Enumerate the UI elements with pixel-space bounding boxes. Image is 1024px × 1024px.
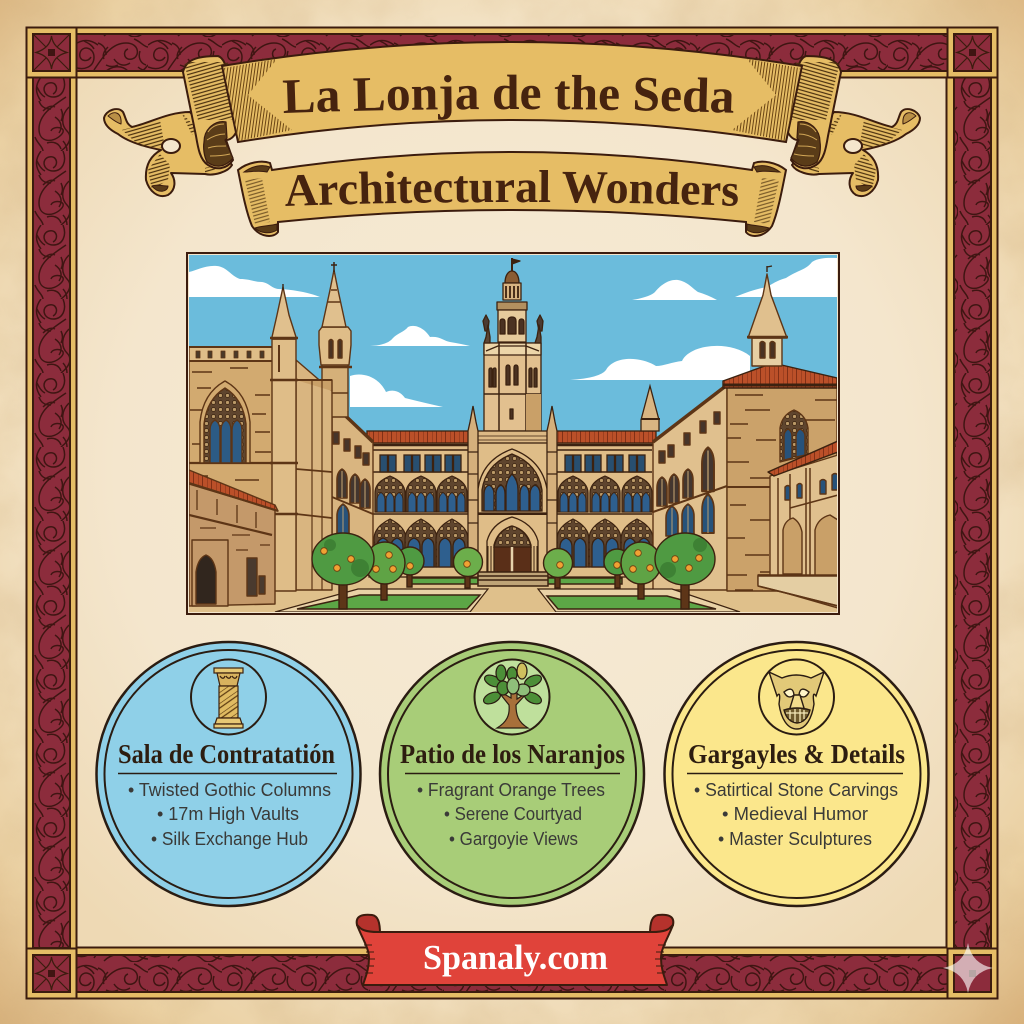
border: right band — [954, 76, 991, 948]
watermark sparkle — [943, 943, 993, 993]
sky — [189, 255, 837, 437]
left wing — [189, 262, 373, 606]
footer ribbon — [357, 915, 673, 985]
bullet list: • Gargoyie Views — [449, 829, 578, 849]
big left block — [189, 362, 272, 503]
ribbon tail and fold: left — [104, 56, 238, 196]
border: bottom band — [76, 955, 948, 992]
central tower — [483, 258, 543, 431]
main door — [487, 517, 538, 572]
clouds — [189, 258, 837, 407]
subtitle text: Architectural Wonders — [285, 170, 738, 206]
big right block — [727, 386, 837, 591]
ribbon tail and fold: right — [786, 56, 920, 196]
low left building — [189, 484, 275, 606]
heading: Sala de Contratatión — [118, 739, 335, 769]
bullet list — [128, 780, 331, 849]
orange trees — [312, 533, 715, 609]
large gothic window — [200, 381, 250, 463]
border: top band — [76, 34, 948, 71]
bullet list — [694, 780, 898, 849]
second block — [296, 360, 332, 590]
right roof and spire — [723, 363, 837, 388]
bullet list: • Serene Courtyad — [444, 804, 582, 824]
website text: Spanaly.com — [423, 938, 608, 977]
heading: Patio de los Naranjos — [400, 739, 625, 769]
low right building — [758, 455, 838, 608]
bullet list: • Master Sculptures — [718, 829, 872, 849]
bullet list: • Fragrant Orange Trees — [417, 780, 605, 800]
icon: orange tree — [474, 660, 550, 734]
title ribbon — [103, 41, 921, 236]
ribbon main body — [222, 42, 802, 142]
rose window arch — [478, 449, 547, 513]
panel: Sala de Contratación — [96, 642, 360, 906]
illustration: La Lonja building and courtyard — [187, 253, 839, 614]
bullet list: • Medieval Humor — [722, 804, 868, 824]
heading: Gargayles & Details — [688, 739, 905, 769]
courtyard lawns — [275, 572, 740, 612]
bullet list: • Twisted Gothic Columns — [128, 780, 331, 800]
subtitle ribbon — [236, 151, 788, 237]
roofs — [367, 431, 471, 443]
bullet list — [417, 780, 605, 849]
bullet list: • Satirtical Stone Carvings — [694, 780, 898, 800]
title text: La Lonja de the Seda — [282, 74, 734, 120]
buttress spire — [272, 339, 296, 591]
ground — [189, 575, 837, 612]
bullet list: • Silk Exchange Hub — [151, 829, 308, 849]
round stair tower — [321, 366, 349, 418]
right wing — [653, 266, 838, 608]
icon: gargoyle face — [759, 660, 834, 734]
pinnacles — [468, 406, 478, 577]
small right spire — [641, 386, 659, 431]
panel: Gargayles & Details — [664, 642, 928, 906]
border: left band — [33, 76, 70, 948]
central cloister facade — [367, 386, 660, 577]
bullet list: • 17m High Vaults — [157, 804, 299, 824]
icon: twisted column — [191, 660, 266, 734]
panel: Patio de los Naranjos — [380, 642, 644, 906]
